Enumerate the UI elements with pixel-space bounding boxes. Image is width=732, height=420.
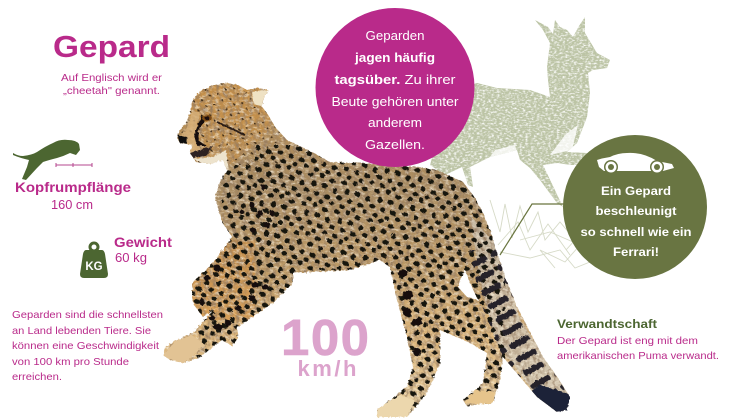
relation text: amerikanischen Puma verwandt.: [557, 350, 719, 362]
panel: hunting circle: anderem: [368, 116, 422, 130]
relation text: [557, 317, 719, 362]
relation text: Verwandtschaft: [557, 317, 657, 331]
panel: hunting circle: jagen häufig: [354, 51, 435, 65]
icon: weight: KG: [85, 261, 103, 273]
stat: body length: [15, 179, 131, 212]
speed description: erreichen.: [12, 371, 62, 383]
panel: Ferrari circle: so schnell wie ein: [580, 227, 692, 239]
intro text: Auf Englisch wird er: [61, 72, 163, 84]
stat: weight: Gewicht: [114, 234, 172, 250]
panel: hunting circle: tagsüber. Zu ihrer: [334, 73, 456, 87]
stat: weight: 60 kg: [115, 251, 147, 265]
panel: hunting circle: Beute gehören unter: [332, 95, 458, 109]
panel: Ferrari circle: beschleunigt: [596, 206, 677, 218]
large spots on shoulder and legs: [200, 184, 422, 356]
speed figure: km/h: [298, 356, 356, 381]
intro text: „cheetah" genannt.: [63, 85, 160, 97]
gazelle illustration: [430, 10, 620, 272]
panel: hunting circle: Geparden: [366, 29, 425, 43]
title: Gepard: [53, 29, 170, 64]
stat: weight: [114, 234, 172, 265]
speed description: können eine Geschwindigkeit: [12, 340, 159, 352]
grass under the gazelle: [490, 200, 610, 272]
panel: Ferrari circle: Ferrari!: [613, 247, 659, 259]
panel: Ferrari circle: [563, 135, 707, 279]
speed description: [12, 309, 163, 383]
icon: sports car: [597, 153, 674, 174]
intro text: [61, 72, 163, 97]
panel: hunting circle: Gazellen.: [365, 138, 425, 152]
stat: body length: Kopfrumpflänge: [15, 179, 131, 195]
cheetah photo: [160, 80, 575, 420]
icon: leaping panther with ruler: [13, 140, 92, 180]
relation text: Der Gepard ist eng mit dem: [557, 335, 698, 347]
connector line: [500, 204, 566, 255]
speed description: an Land lebenden Tiere. Sie: [12, 325, 151, 337]
speed figure: 100: [281, 309, 369, 366]
speed description: von 100 km pro Stunde: [12, 356, 129, 368]
face: [175, 112, 200, 160]
stat: body length: 160 cm: [51, 198, 93, 212]
icon: weight: [80, 243, 108, 278]
speed description: Geparden sind die schnellsten: [12, 309, 163, 321]
panel: hunting circle: [316, 8, 474, 167]
panel: Ferrari circle: Ein Gepard: [601, 186, 671, 198]
